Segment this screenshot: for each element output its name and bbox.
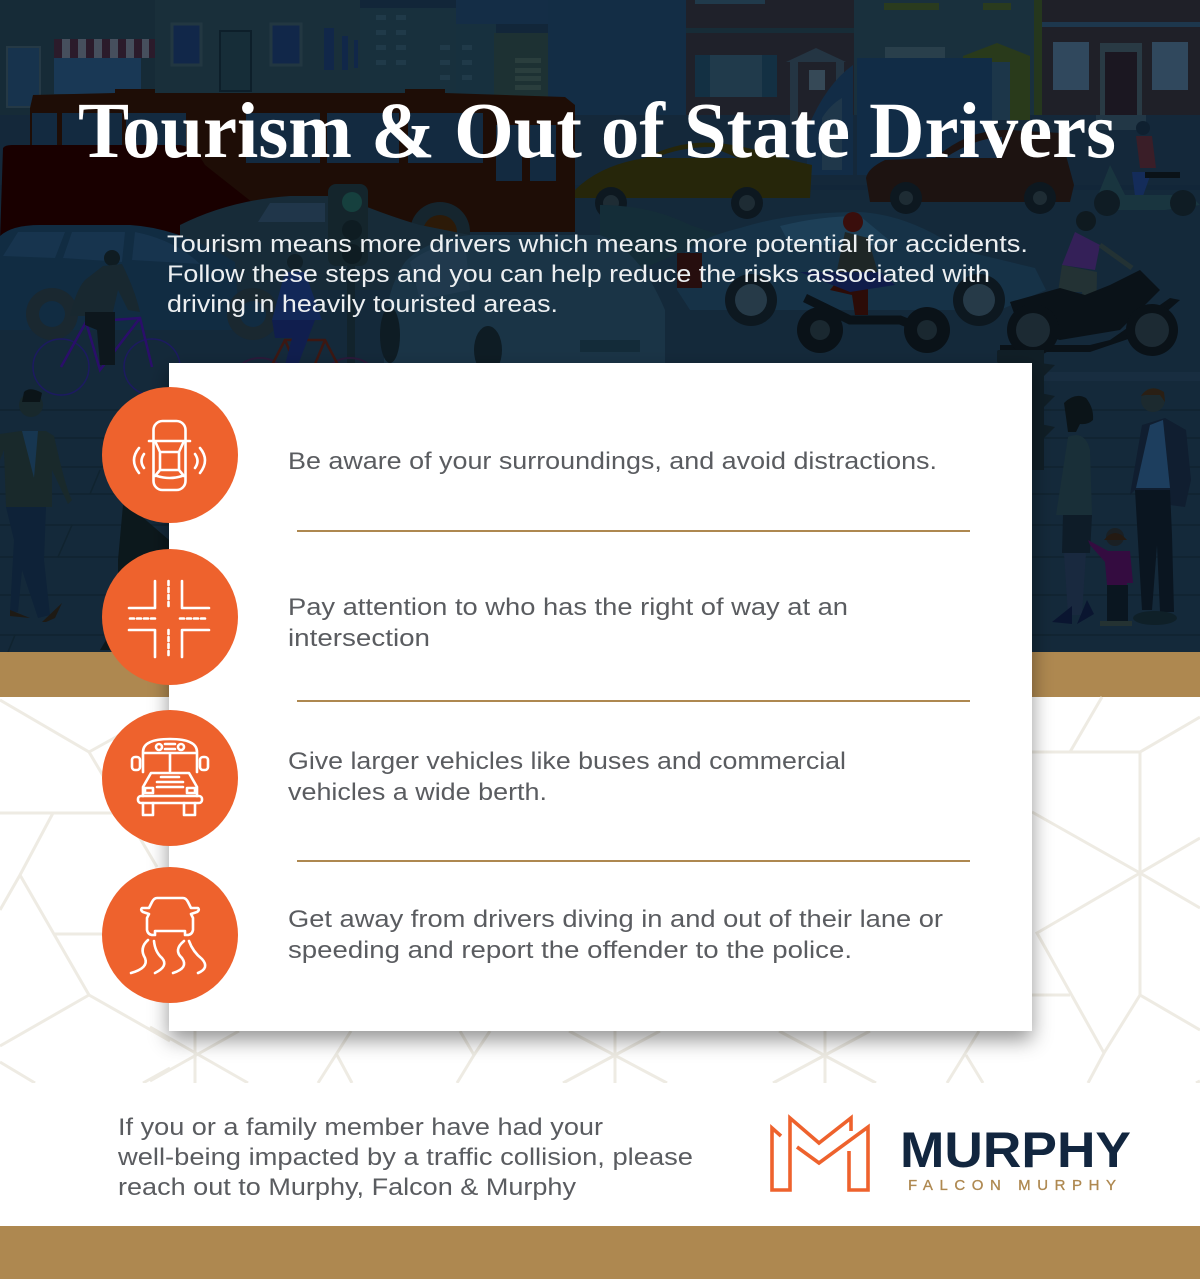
panel: geometric pattern background [0,697,1200,1083]
illustrated street scene background [0,0,1200,652]
buildings row [0,0,1200,185]
closing call to action text [117,1114,693,1201]
awning [54,39,155,58]
tip 3 text: Give larger vehicles like buses and commercial [288,748,846,775]
gold band lower [0,1226,1200,1279]
brown car [866,130,1074,214]
tip 4 text [288,906,943,964]
closing call to action text: well-being impacted by a traffic collision, please [117,1144,693,1171]
blue hatchback car [0,225,279,340]
panel: white tips card [169,363,1032,1031]
tip 3 text: vehicles a wide berth. [288,779,547,806]
intro text: Follow these steps and you can help reduce the risks associated with [167,261,990,288]
tip 4 text: Get away from drivers diving in and out of their lane or [288,906,943,933]
cyclist in blue [230,254,380,418]
logo subtitle: FALCON MURPHY [908,1177,1116,1194]
tip 2 text: Pay attention to who has the right of way at an [288,594,848,621]
tip 2 text: intersection [288,625,430,652]
man in suit [1130,388,1191,625]
cyclist in suit [33,250,180,395]
dimming veil over buildings [0,0,1200,190]
tip 2 text [288,594,848,652]
motorcycle rider in red helmet [797,212,950,353]
child [1088,528,1133,626]
icon: swerving car [102,867,238,1003]
man in blazer [0,389,72,622]
silver car [380,235,665,374]
sidewalk paving [0,410,1200,652]
intro text: driving in heavily touristed areas. [167,291,558,318]
closing call to action text: reach out to Murphy, Falcon & Murphy [118,1174,576,1201]
red van [0,145,268,240]
logo mark [772,1118,868,1190]
icon: car with sensors [102,387,238,523]
logo: Murphy Falcon Murphy [772,1118,1131,1194]
delivery truck [807,58,992,175]
grey sedan [180,196,500,290]
icon: bus [102,710,238,846]
band of lighter pavement [1032,372,1200,381]
person behind icons [100,505,169,650]
right traffic light [997,350,1055,470]
olive car [575,143,812,219]
traffic light [328,184,368,363]
green car [600,205,720,270]
tip 1 text: Be aware of your surroundings, and avoid distractions. [288,448,937,475]
tip 3 text [288,748,846,806]
tip 4 text: speeding and report the offender to the police. [288,937,852,964]
footer white band [0,1083,1200,1226]
logo wordmark: MURPHY [900,1122,1131,1178]
bus [30,89,575,262]
intro text: Tourism means more drivers which means more potential for accidents. [167,231,1028,258]
blue sedan [677,212,1046,326]
intro text [167,231,1028,318]
gold band upper [0,652,1200,697]
icon: intersection [102,549,238,685]
woman with child [1052,396,1094,624]
closing call to action text: If you or a family member have had your [118,1114,603,1141]
title: Tourism & Out of State Drivers [78,88,1116,175]
scooter rider [1094,121,1200,216]
motorcycle rider in purple shirt [1000,211,1180,356]
